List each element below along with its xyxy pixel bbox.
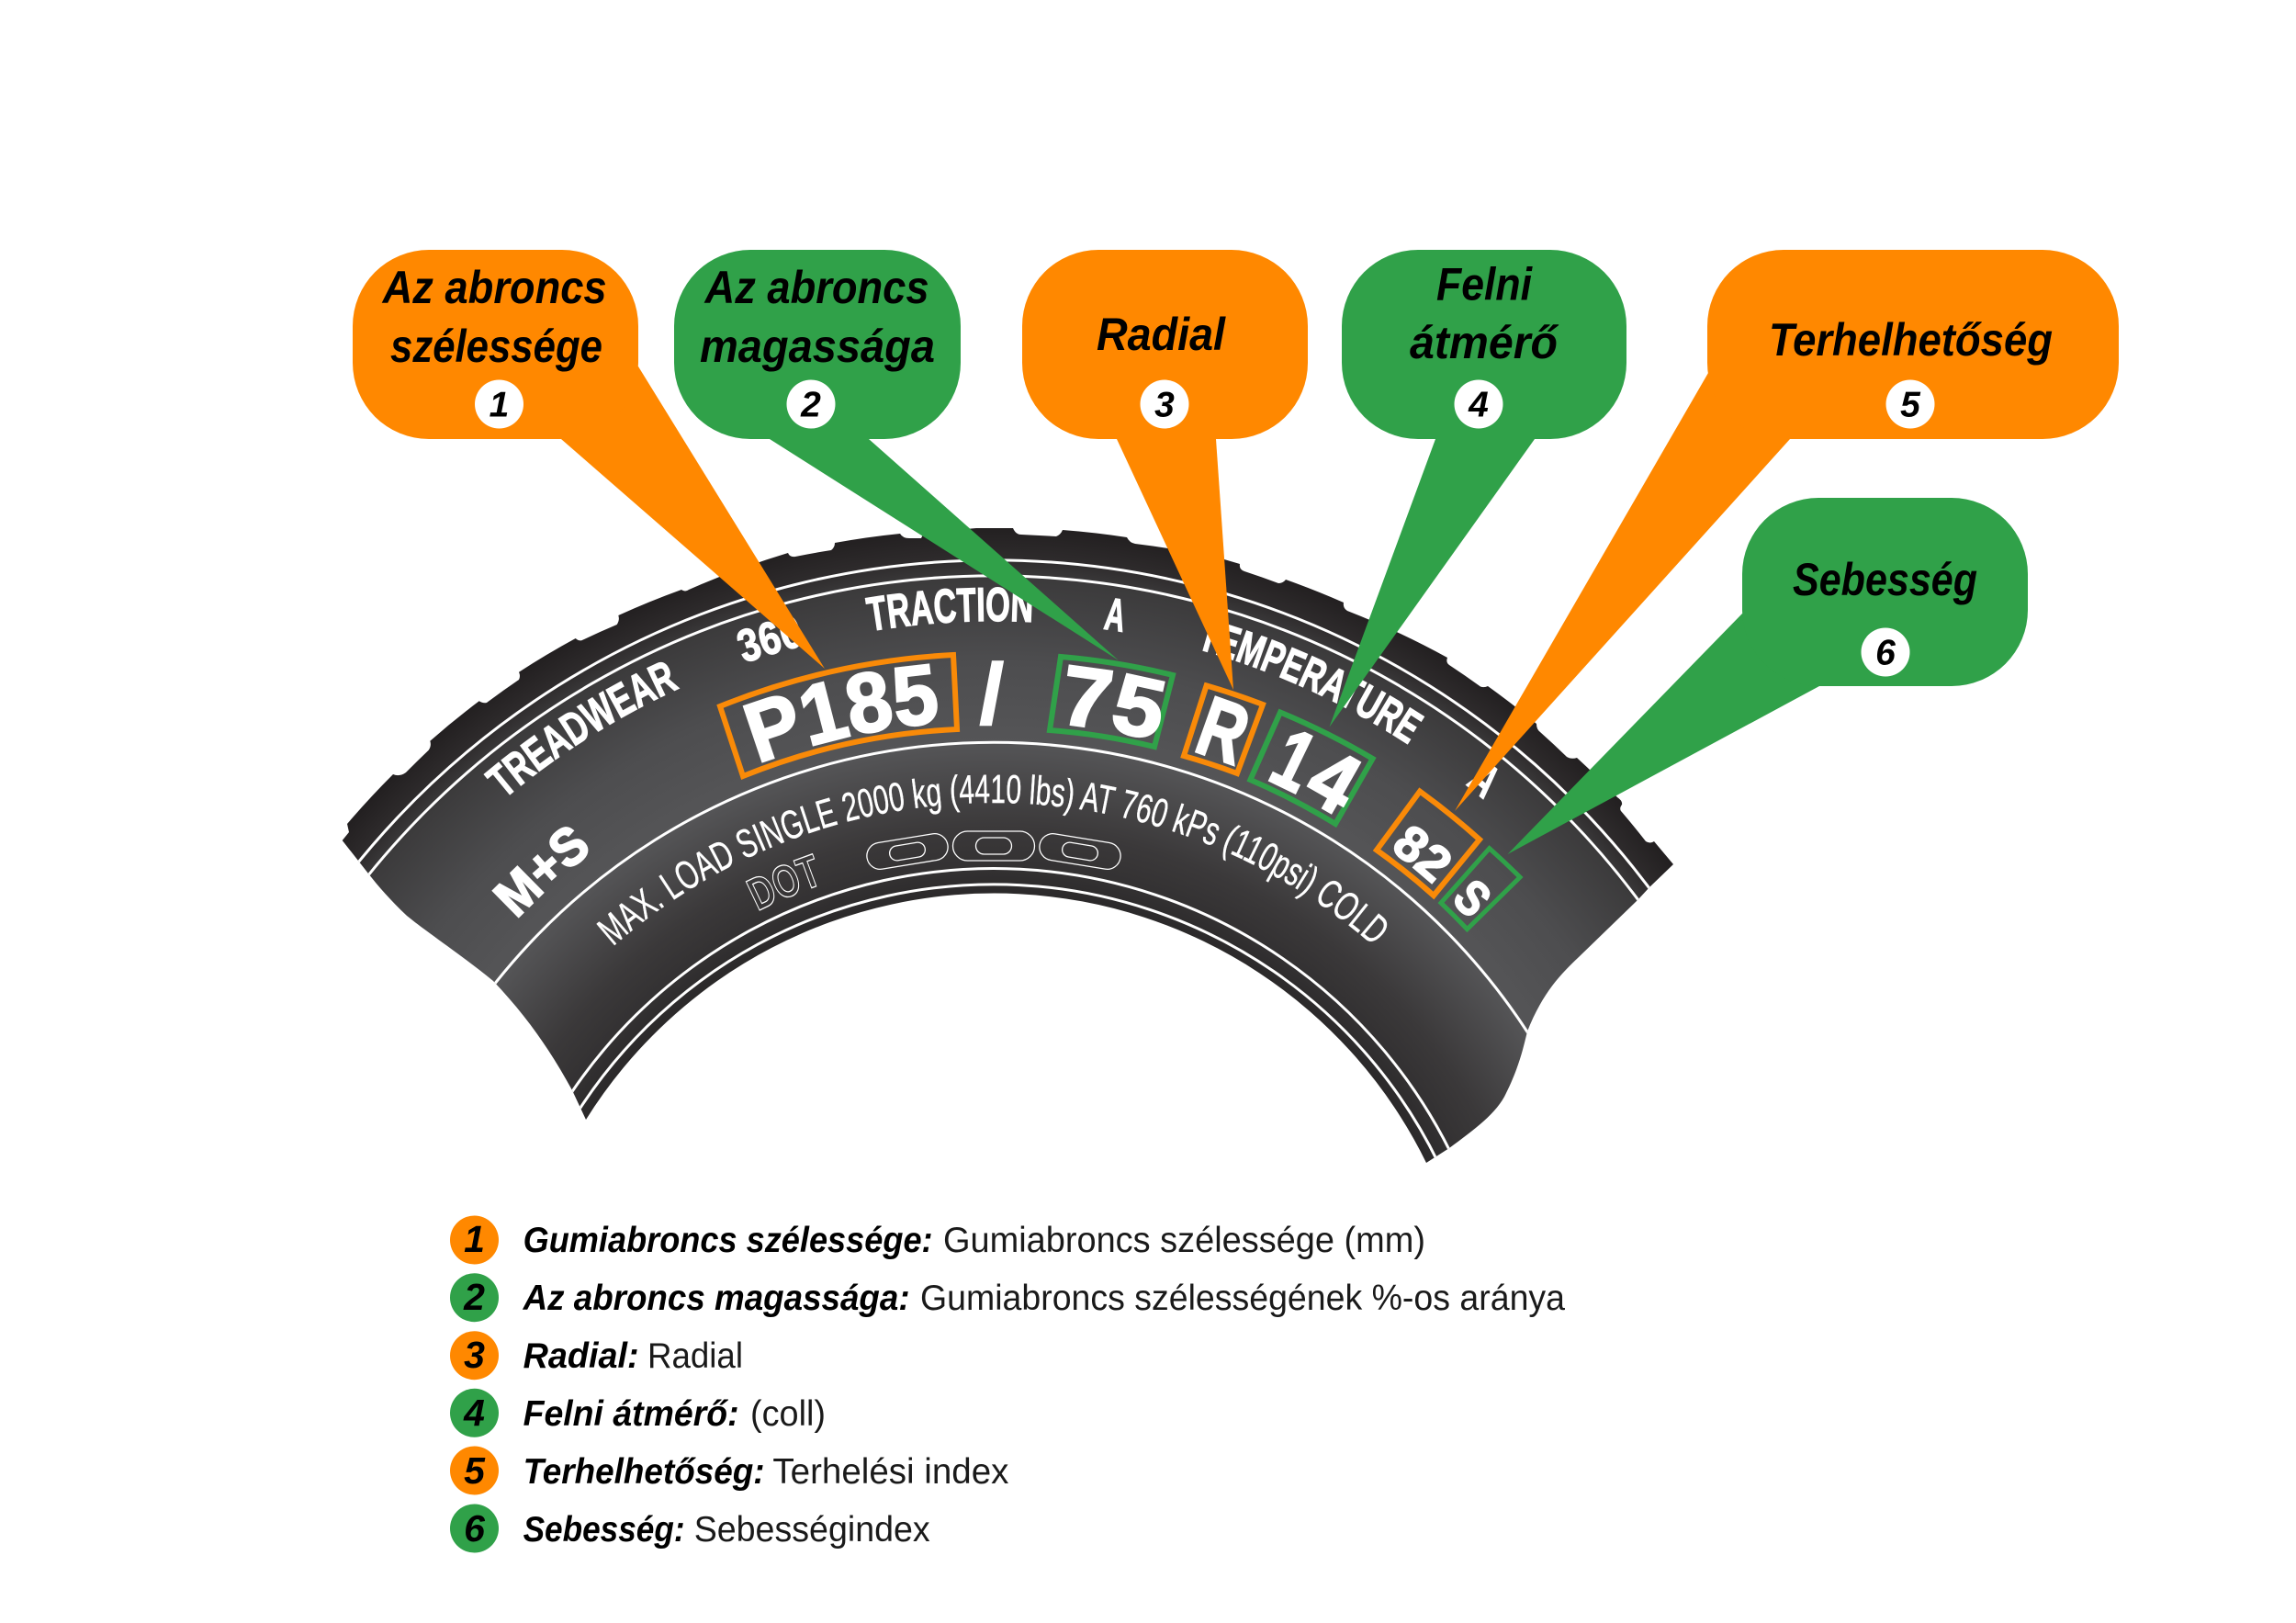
value: S: S [1443,869,1502,928]
sidewall label: temperature grade A: A [1466,766,1498,800]
value: P185: P185 [742,663,938,763]
sidewall label: TRACTION: TRACTION [865,587,1032,630]
value: 14: 14 [1257,711,1375,833]
sidewall label: DOT outline: DOT [746,852,817,911]
callout 2: Az abroncs magassága: Az abroncs [703,262,929,313]
callout 4: Felni átmérő: 4 [1468,386,1489,424]
legend row 2: Gumiabroncs szélességének %-os aránya [920,1279,1565,1318]
legend row 5: Terhelhetőség: [523,1452,765,1492]
callout 1: Az abroncs szélessége [353,250,825,669]
highlight box: 82 [1377,792,1480,896]
callout 1: Az abroncs szélessége: Az abroncs [381,262,607,313]
highlight box: 14 [1250,713,1373,824]
legend row 4 [450,1389,826,1437]
value: 75: 75 [1055,648,1174,759]
legend row 1: 1 [464,1218,485,1260]
highlight box: 75 [1050,657,1173,747]
highlight box: S [1441,849,1520,930]
legend row 1: Gumiabroncs szélessége (mm) [943,1221,1425,1260]
legend row 4: Felni átmérő: [523,1394,739,1434]
highlight box: R [1184,685,1263,773]
callout 4: Felni átmérő: Felni [1436,259,1533,310]
callout 3: Radial [1022,250,1308,690]
legend row 2: Az abroncs magassága: [523,1279,910,1318]
callout 1: Az abroncs szélessége: 1 [490,386,509,424]
legend row 2 [450,1273,1565,1322]
value: 82: 82 [1383,815,1462,893]
sidewall label: TEMPERATURE: TEMPERATURE [1202,625,1425,745]
callout 2: Az abroncs magassága [674,250,1119,660]
legend row 1 [450,1216,1425,1264]
legend row 3: Radial [647,1336,743,1376]
legend row 6: Sebességindex [694,1510,930,1550]
callout 6: Sebesség [1508,498,2028,854]
legend row 3 [450,1331,743,1380]
sidewall label: TREADWEAR: TREADWEAR [483,661,680,795]
sidewall label: 360: 360 [737,617,799,661]
legend row 6 [450,1505,930,1552]
legend row 4: (coll) [750,1394,826,1434]
callout 5: Terhelhetőség: 5 [1900,386,1921,424]
legend row 1: Gumiabroncs szélessége: [523,1221,933,1260]
sidewall label: M+S: M+S [491,827,588,919]
callout 2: Az abroncs magassága: 2 [800,386,821,424]
legend [450,1216,1565,1552]
callout 6: Sebesség: Sebesség [1793,554,1977,605]
callout 3: Radial: Radial [1097,309,1226,360]
legend row 2: 2 [463,1276,485,1318]
callout 3: Radial: 3 [1154,386,1175,424]
callout 2: Az abroncs magassága: magassága [700,321,935,372]
callout 4: Felni átmérő [1330,250,1626,727]
legend row 5: 5 [464,1449,486,1492]
tire body [331,514,1690,1176]
callout 5: Terhelhetőség: Terhelhetőség [1769,314,2053,366]
legend row 3: Radial: [523,1336,639,1376]
callout 1: Az abroncs szélessége: szélessége [390,321,602,372]
legend row 6: Sebesség: [523,1510,685,1550]
sidewall label: max load: MAX. LOAD SINGLE 2000 kg (4410 lbs) AT 760 kPs (110psi) COLD [596,774,1387,946]
tire sidewall [342,528,1673,1163]
callout 6: Sebesség: 6 [1875,634,1896,672]
DOT code pills [865,831,1122,872]
callout 5: Terhelhetőség [1455,250,2119,811]
legend row 6: 6 [464,1507,486,1550]
value: R: R [1186,680,1260,783]
legend row 3: 3 [464,1334,485,1376]
highlight box: P185 [720,655,957,776]
legend row 4: 4 [463,1392,485,1434]
callout 4: Felni átmérő: átmérő [1410,317,1559,368]
legend row 5: Terhelési index [772,1452,1009,1492]
legend row 5 [450,1446,1009,1495]
separator slash: / [980,648,1004,741]
tire size code [720,647,1520,930]
sidewall label: A: A [1103,598,1122,632]
